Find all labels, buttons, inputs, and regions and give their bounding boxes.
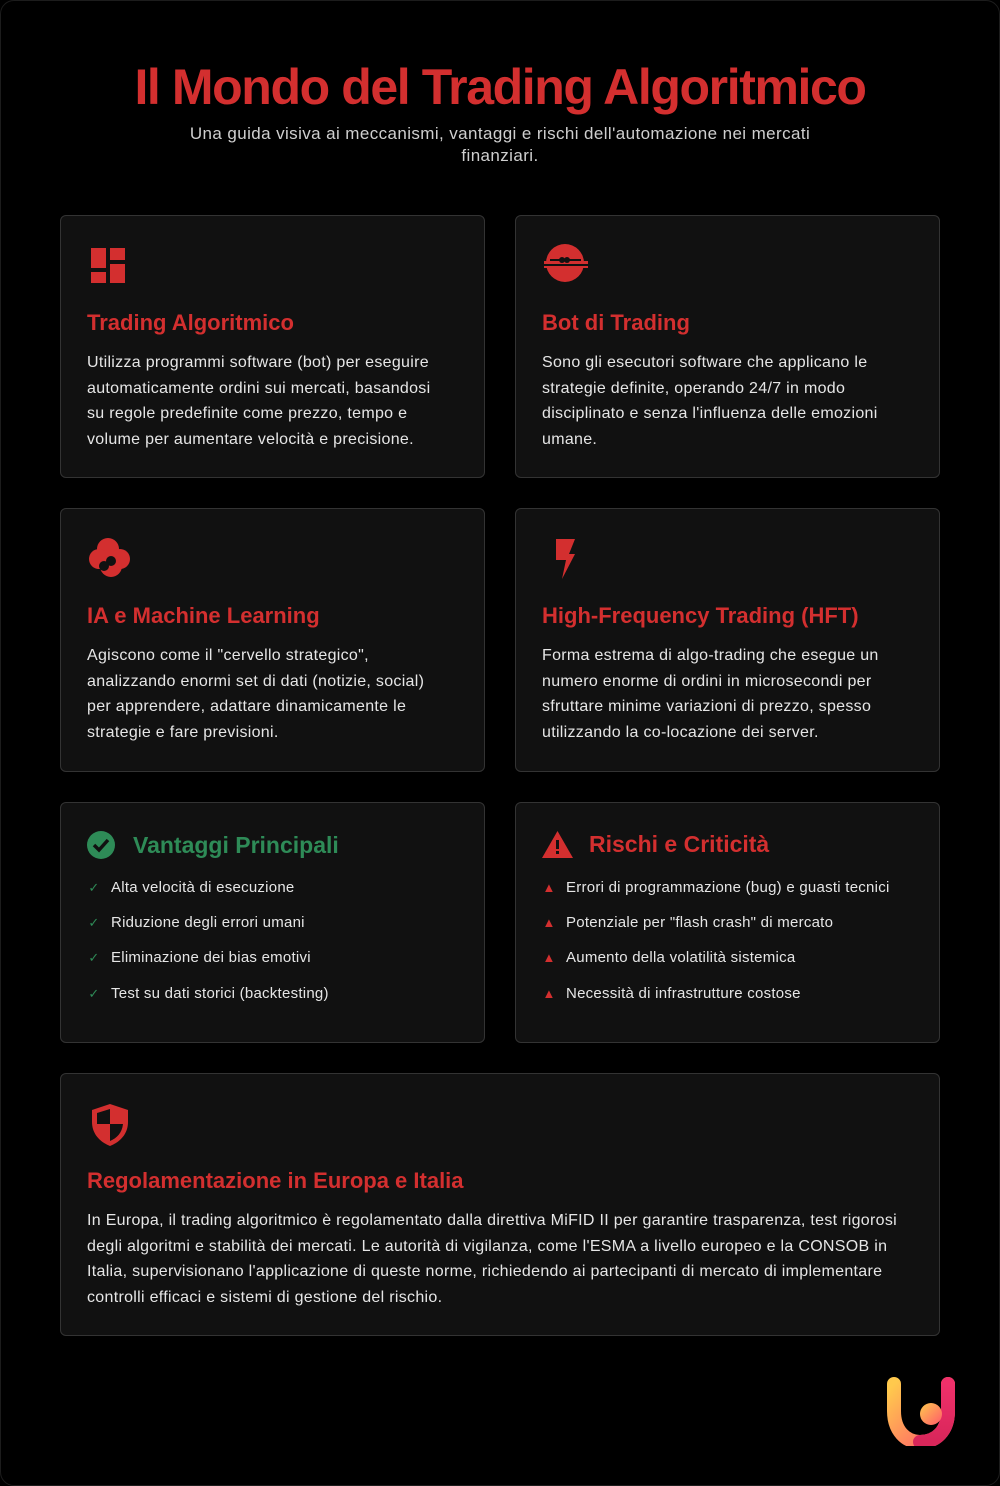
- heading: Trading Algoritmico: [87, 310, 294, 335]
- panel: trading algoritmico: [60, 215, 485, 478]
- list: [88, 879, 329, 1002]
- icon: lightning: [556, 539, 575, 579]
- panel: vantaggi: [60, 802, 485, 1043]
- text: In Europa, il trading algoritmico è regolamentato dalla direttiva MiFID II per garantire trasparenza, test rigorosi degli algoritmi e stabilità dei mercati. Le autorità di vigilanza, come l'ESMA a livello europeo e la CONSOB in Italia, supervisionano l'applicazione di queste norme, richiedendo ai partecipanti di mercato di implementare controlli efficaci e sistemi di gestione del rischio.: [87, 1212, 897, 1306]
- list: ✓: [88, 950, 100, 965]
- heading with check icon: Vantaggi Principali: [133, 832, 339, 858]
- list: Alta velocità di esecuzione: [111, 879, 295, 896]
- heading: Regolamentazione in Europa e Italia: [87, 1168, 464, 1193]
- heading with warning icon: Rischi e Criticità: [589, 831, 769, 857]
- icon: shield: [92, 1104, 128, 1146]
- list: [542, 879, 890, 1002]
- list: ✓: [88, 915, 100, 930]
- logo: [887, 1377, 955, 1446]
- text: Agiscono come il "cervello strategico", analizzando enormi set di dati (notizie, social) per apprendere, adattare dinamicamente le strategie e fare previsioni.: [87, 647, 424, 741]
- list: Test su dati storici (backtesting): [111, 985, 329, 1002]
- list: Necessità di infrastrutture costose: [566, 985, 801, 1002]
- title: Il Mondo del Trading Algoritmico: [134, 59, 866, 115]
- subtitle: Una guida visiva ai meccanismi, vantaggi e rischi dell'automazione nei mercati finanziari.: [190, 124, 810, 165]
- list: Riduzione degli errori umani: [111, 914, 305, 931]
- list: ✓: [88, 880, 100, 895]
- list: ▲: [542, 915, 556, 930]
- list: ▲: [542, 880, 556, 895]
- list: ▲: [542, 950, 556, 965]
- list: Aumento della volatilità sistemica: [566, 949, 795, 966]
- text: Sono gli esecutori software che applicano le strategie definite, operando 24/7 in modo disciplinato e senza l'influenza delle emozioni umane.: [542, 354, 878, 448]
- panel: HFT: [515, 508, 940, 772]
- icon: brain cloud: [89, 538, 130, 577]
- icon: dashboard: [91, 248, 125, 283]
- list: ✓: [88, 986, 100, 1001]
- list: Eliminazione dei bias emotivi: [111, 949, 311, 966]
- text: Utilizza programmi software (bot) per eseguire automaticamente ordini sui mercati, basandosi su regole predefinite come prezzo, tempo e volume per aumentare velocità e precisione.: [87, 354, 430, 448]
- list: Potenziale per "flash crash" di mercato: [566, 914, 833, 931]
- list: ▲: [542, 986, 556, 1001]
- panel: bot di trading: [515, 215, 940, 478]
- heading: IA e Machine Learning: [87, 603, 320, 628]
- panel: regolamentazione: [60, 1073, 940, 1336]
- list: Errori di programmazione (bug) e guasti tecnici: [566, 879, 890, 896]
- icon: bot: [544, 244, 588, 282]
- panel: rischi: [515, 802, 940, 1043]
- text: Forma estrema di algo-trading che esegue un numero enorme di ordini in microsecondi per sfruttare minime variazioni di prezzo, spesso utilizzando la co-locazione dei server.: [542, 647, 879, 741]
- heading: Bot di Trading: [542, 310, 690, 335]
- heading: High-Frequency Trading (HFT): [542, 603, 859, 628]
- panel: IA e ML: [60, 508, 485, 772]
